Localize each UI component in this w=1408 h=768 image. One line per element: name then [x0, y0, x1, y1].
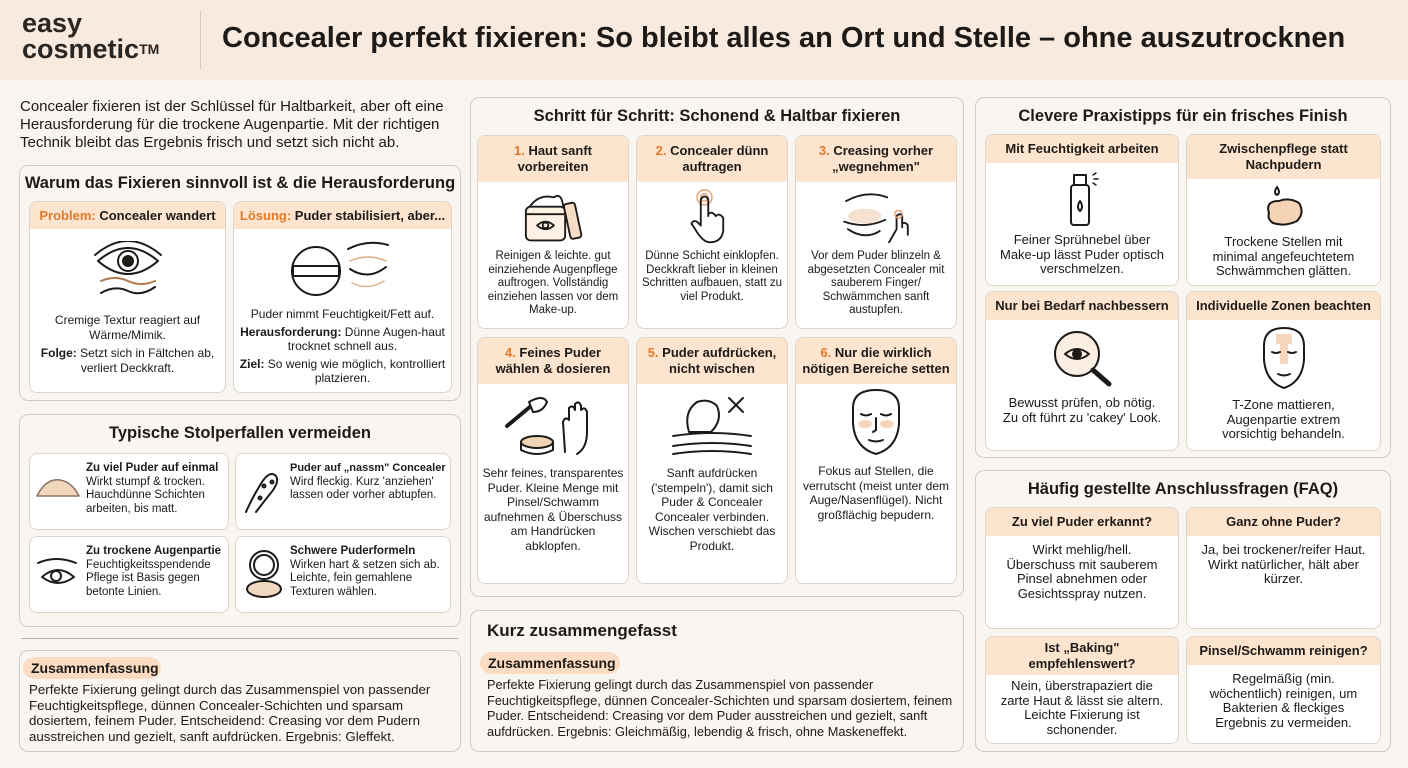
card: nass: Wird fleckig. Kurz 'anziehen' lassen oder vorher abtupfen.	[290, 476, 436, 501]
card: zu viel puder: Zu viel Puder auf einmal	[86, 462, 218, 474]
intro text: Concealer fixieren ist der Schlüssel für Haltbarkeit, aber oft eine Herausforderung für die trockene Augenpartie. Mit der richtigen Technik bleibt das Ergebnis frisch und setzt sich nicht ab.	[20, 98, 444, 151]
faq 4: Regelmäßig (min. wöchentlich) reinigen, um Bakterien & fleckiges Ergebnis zu vermeiden.	[1210, 671, 1357, 730]
icon: brush and powder	[504, 397, 588, 455]
card: zu viel puder: Wirkt stumpf & trocken. Hauchdünne Schichten arbeiten, bis matt.	[86, 476, 205, 514]
faq 1	[985, 507, 1179, 629]
panel: Schritt fuer Schritt: Schritt für Schritt: Schonend & Haltbar fixieren	[534, 107, 900, 125]
panel: Zusammenfassung links	[19, 650, 461, 752]
card: zu viel puder	[29, 453, 229, 530]
card: problem: Problem:	[39, 208, 96, 222]
icon: face	[852, 389, 900, 455]
title: Concealer perfekt fixieren: So bleibt alles an Ort und Stelle – ohne auszutrocknen	[222, 22, 1345, 54]
icon: finger tap	[690, 189, 724, 244]
panel: Kurz zusammengefasst: Kurz zusammengefasst	[487, 621, 677, 640]
panel: FAQ: Häufig gestellte Anschlussfragen (FAQ)	[1028, 480, 1338, 498]
card: trockene augenpartie	[29, 536, 229, 613]
faq 1: Wirkt mehlig/hell. Überschuss mit sauberem Pinsel abnehmen oder Gesichtsspray nutzen.	[1006, 542, 1158, 600]
faq 2: Ganz ohne Puder?	[1226, 514, 1341, 529]
icon: magnifier eye	[1054, 331, 1112, 386]
card: loesung	[233, 201, 452, 393]
tip 4: T-Zone mattieren, Augenpartie extrem vorsichtig behandeln.	[1222, 397, 1345, 441]
step 4: 4. Feines Puder	[505, 345, 601, 360]
faq 4	[1186, 636, 1381, 744]
header band	[0, 0, 1408, 80]
tip 4	[1186, 291, 1381, 451]
card: nass	[235, 453, 451, 530]
badge	[23, 657, 161, 679]
step 4: wählen & dosieren	[496, 361, 610, 376]
icon: spray	[1070, 172, 1099, 226]
tip 1: Feiner Sprühnebel über Make-up lässt Puder optisch verschmelzen.	[1000, 232, 1164, 276]
faq 3	[985, 636, 1179, 744]
faq 3: Ist „Baking"	[1045, 640, 1119, 655]
logo: cosmeticTM	[22, 34, 159, 64]
step 2: auftragen	[682, 159, 742, 174]
step 2: Dünne Schicht einklopfen. Deckkraft lieber in kleinen Schritten aufbauen, statt zu viel Produkt.	[642, 250, 782, 302]
card: schwere puderformeln	[235, 536, 451, 613]
card: nass: Puder auf „nassm" Concealer	[290, 462, 446, 474]
tip 4: Individuelle Zonen beachten	[1196, 298, 1371, 313]
icon: puff and eye	[291, 242, 389, 296]
step 1: 1. Haut sanft	[514, 143, 592, 158]
step 3: Vor dem Puder blinzeln & abgesetzten Concealer mit sauberem Finger/ Schwämmchen sanft austupfen.	[808, 250, 944, 316]
step 5: nicht wischen	[669, 361, 755, 376]
step 6: Fokus auf Stellen, die verrutscht (meist unter dem Auge/Nasenflügel). Nicht großflächig bepudern.	[803, 464, 949, 522]
badge: Zusammenfassung	[31, 660, 159, 676]
step 2	[636, 135, 788, 329]
card: loesung: Ziel: So wenig wie möglich, kontrolliert platzieren.	[240, 356, 445, 385]
step 3: „wegnehmen"	[832, 159, 920, 174]
tip 3: Nur bei Bedarf nachbessern	[995, 298, 1169, 313]
faq 4: Pinsel/Schwamm reinigen?	[1199, 643, 1368, 658]
faq 3: empfehlenswert?	[1029, 656, 1135, 671]
panel: Schritt fuer Schritt	[470, 97, 964, 597]
tip 2	[1186, 134, 1381, 286]
card: loesung: Herausforderung: Dünne Augen-haut trocknet schnell aus.	[240, 324, 445, 353]
step 6: nötigen Bereiche setten	[802, 361, 950, 376]
card: loesung: Lösung:	[240, 208, 291, 222]
card: problem: Folge: Setzt sich in Fältchen ab, verliert Deckkraft.	[41, 346, 214, 374]
icon: sponge press	[672, 397, 752, 455]
faq 2: Ja, bei trockener/reifer Haut. Wirkt natürlicher, hält aber kürzer.	[1201, 542, 1366, 586]
step 2: 2. Concealer dünn	[656, 143, 768, 158]
logo: easy	[22, 8, 82, 38]
panel: Praxistipps	[975, 97, 1391, 458]
card: trockene augenpartie: Feuchtigkeitsspendende Pflege ist Basis gegen betonte Linien.	[86, 558, 211, 598]
step 1: vorbereiten	[518, 159, 588, 174]
step 3	[795, 135, 957, 329]
card: loesung: Puder nimmt Feuchtigkeit/Fett auf.	[251, 307, 434, 321]
faq 2	[1186, 507, 1381, 629]
panel: Stolperfallen: Typische Stolperfallen vermeiden	[109, 424, 371, 442]
tip 1: Mit Feuchtigkeit arbeiten	[1005, 141, 1159, 156]
panel: Zusammenfassung links: Perfekte Fixierung gelingt durch das Zusammenspiel von passender Feuchtigkeitspflege, dünnen Concealer-Schichten und sparsam dosiertem, feinem Puder. Entscheidend: Creasing vor dem Pudern ausstreichen und gezielt, sanft aufdrücken. Ergebnis: Gleffekt.	[29, 682, 430, 744]
badge: Zusammenfassung	[488, 655, 616, 671]
tip 2: Zwischenpflege statt	[1219, 141, 1348, 156]
step 4	[477, 337, 629, 584]
icon: closed eye and finger	[843, 193, 909, 244]
card: loesung: Puder stabilisiert, aber...	[295, 208, 445, 222]
step 6	[795, 337, 957, 584]
panel: Warum: Warum das Fixieren sinnvoll ist & die Herausforderung	[25, 174, 455, 192]
step 5	[636, 337, 788, 584]
step 1	[477, 135, 629, 329]
tip 3: Bewusst prüfen, ob nötig. Zu oft führt zu 'cakey' Look.	[1003, 395, 1161, 424]
tip 1	[985, 134, 1179, 286]
card: schwere puderformeln: Wirken hart & setzen sich ab. Leichte, fein gemahlene Texturen wählen.	[290, 558, 440, 598]
icon: face zones	[1263, 327, 1305, 389]
icon: eye	[94, 241, 162, 294]
step 1: Reinigen & leichte. gut einziehende Augenpflege auftrogen. Vollständig einziehen lassen vor dem Make-up.	[488, 250, 618, 316]
icon: sponge	[1267, 186, 1303, 226]
panel: Warum	[19, 165, 461, 401]
tip 2: Trockene Stellen mit minimal angefeuchtetem Schwämmchen glätten.	[1213, 234, 1354, 278]
card: trockene augenpartie: Zu trockene Augenpartie	[86, 545, 221, 557]
step 6: 6. Nur die wirklich	[820, 345, 932, 360]
icon: cream jar	[524, 194, 582, 242]
panel: Stolperfallen	[19, 414, 461, 627]
panel: FAQ	[975, 470, 1391, 752]
tip 2: Nachpudern	[1246, 157, 1321, 172]
card: problem	[29, 201, 226, 393]
step 5: 5. Puder aufdrücken,	[648, 345, 776, 360]
panel: Kurz zusammengefasst	[470, 610, 964, 752]
faq 1: Zu viel Puder erkannt?	[1012, 514, 1152, 529]
logo	[22, 8, 159, 64]
tip 3	[985, 291, 1179, 451]
step 5: Sanft aufdrücken ('stempeln'), damit sich Puder & Concealer Concealer verbinden. Wischen verschiebt das Produkt.	[649, 466, 775, 552]
badge	[480, 652, 620, 674]
faq 3: Nein, überstrapaziert die zarte Haut & lässt sie altern. Leichte Fixierung ist schonender.	[1001, 678, 1163, 736]
panel: Kurz zusammengefasst: Perfekte Fixierung gelingt durch das Zusammenspiel von passender Feuchtigkeitspflege, dünnen Concealer-Schichten und sparsam dosiertem, feinem Puder. Entscheidend: Creasing vor dem Puder ausstreichen und gezielt, sanft aufdrücken. Ergebnis: Gleichmäßig, lebendig & frisch, ohne Maskeneffekt.	[487, 677, 952, 738]
card: problem: Concealer wandert	[99, 208, 216, 222]
card: schwere puderformeln: Schwere Puderformeln	[290, 545, 415, 557]
panel: Praxistipps: Clevere Praxistipps für ein frisches Finish	[1018, 107, 1348, 125]
step 4: Sehr feines, transparentes Puder. Kleine Menge mit Pinsel/Schwamm aufnehmen & Überschuss am Handrücken abklopfen.	[483, 466, 623, 552]
card: problem: Cremige Textur reagiert auf Wärme/Mimik.	[55, 313, 200, 342]
step 3: 3. Creasing vorher	[819, 143, 933, 158]
